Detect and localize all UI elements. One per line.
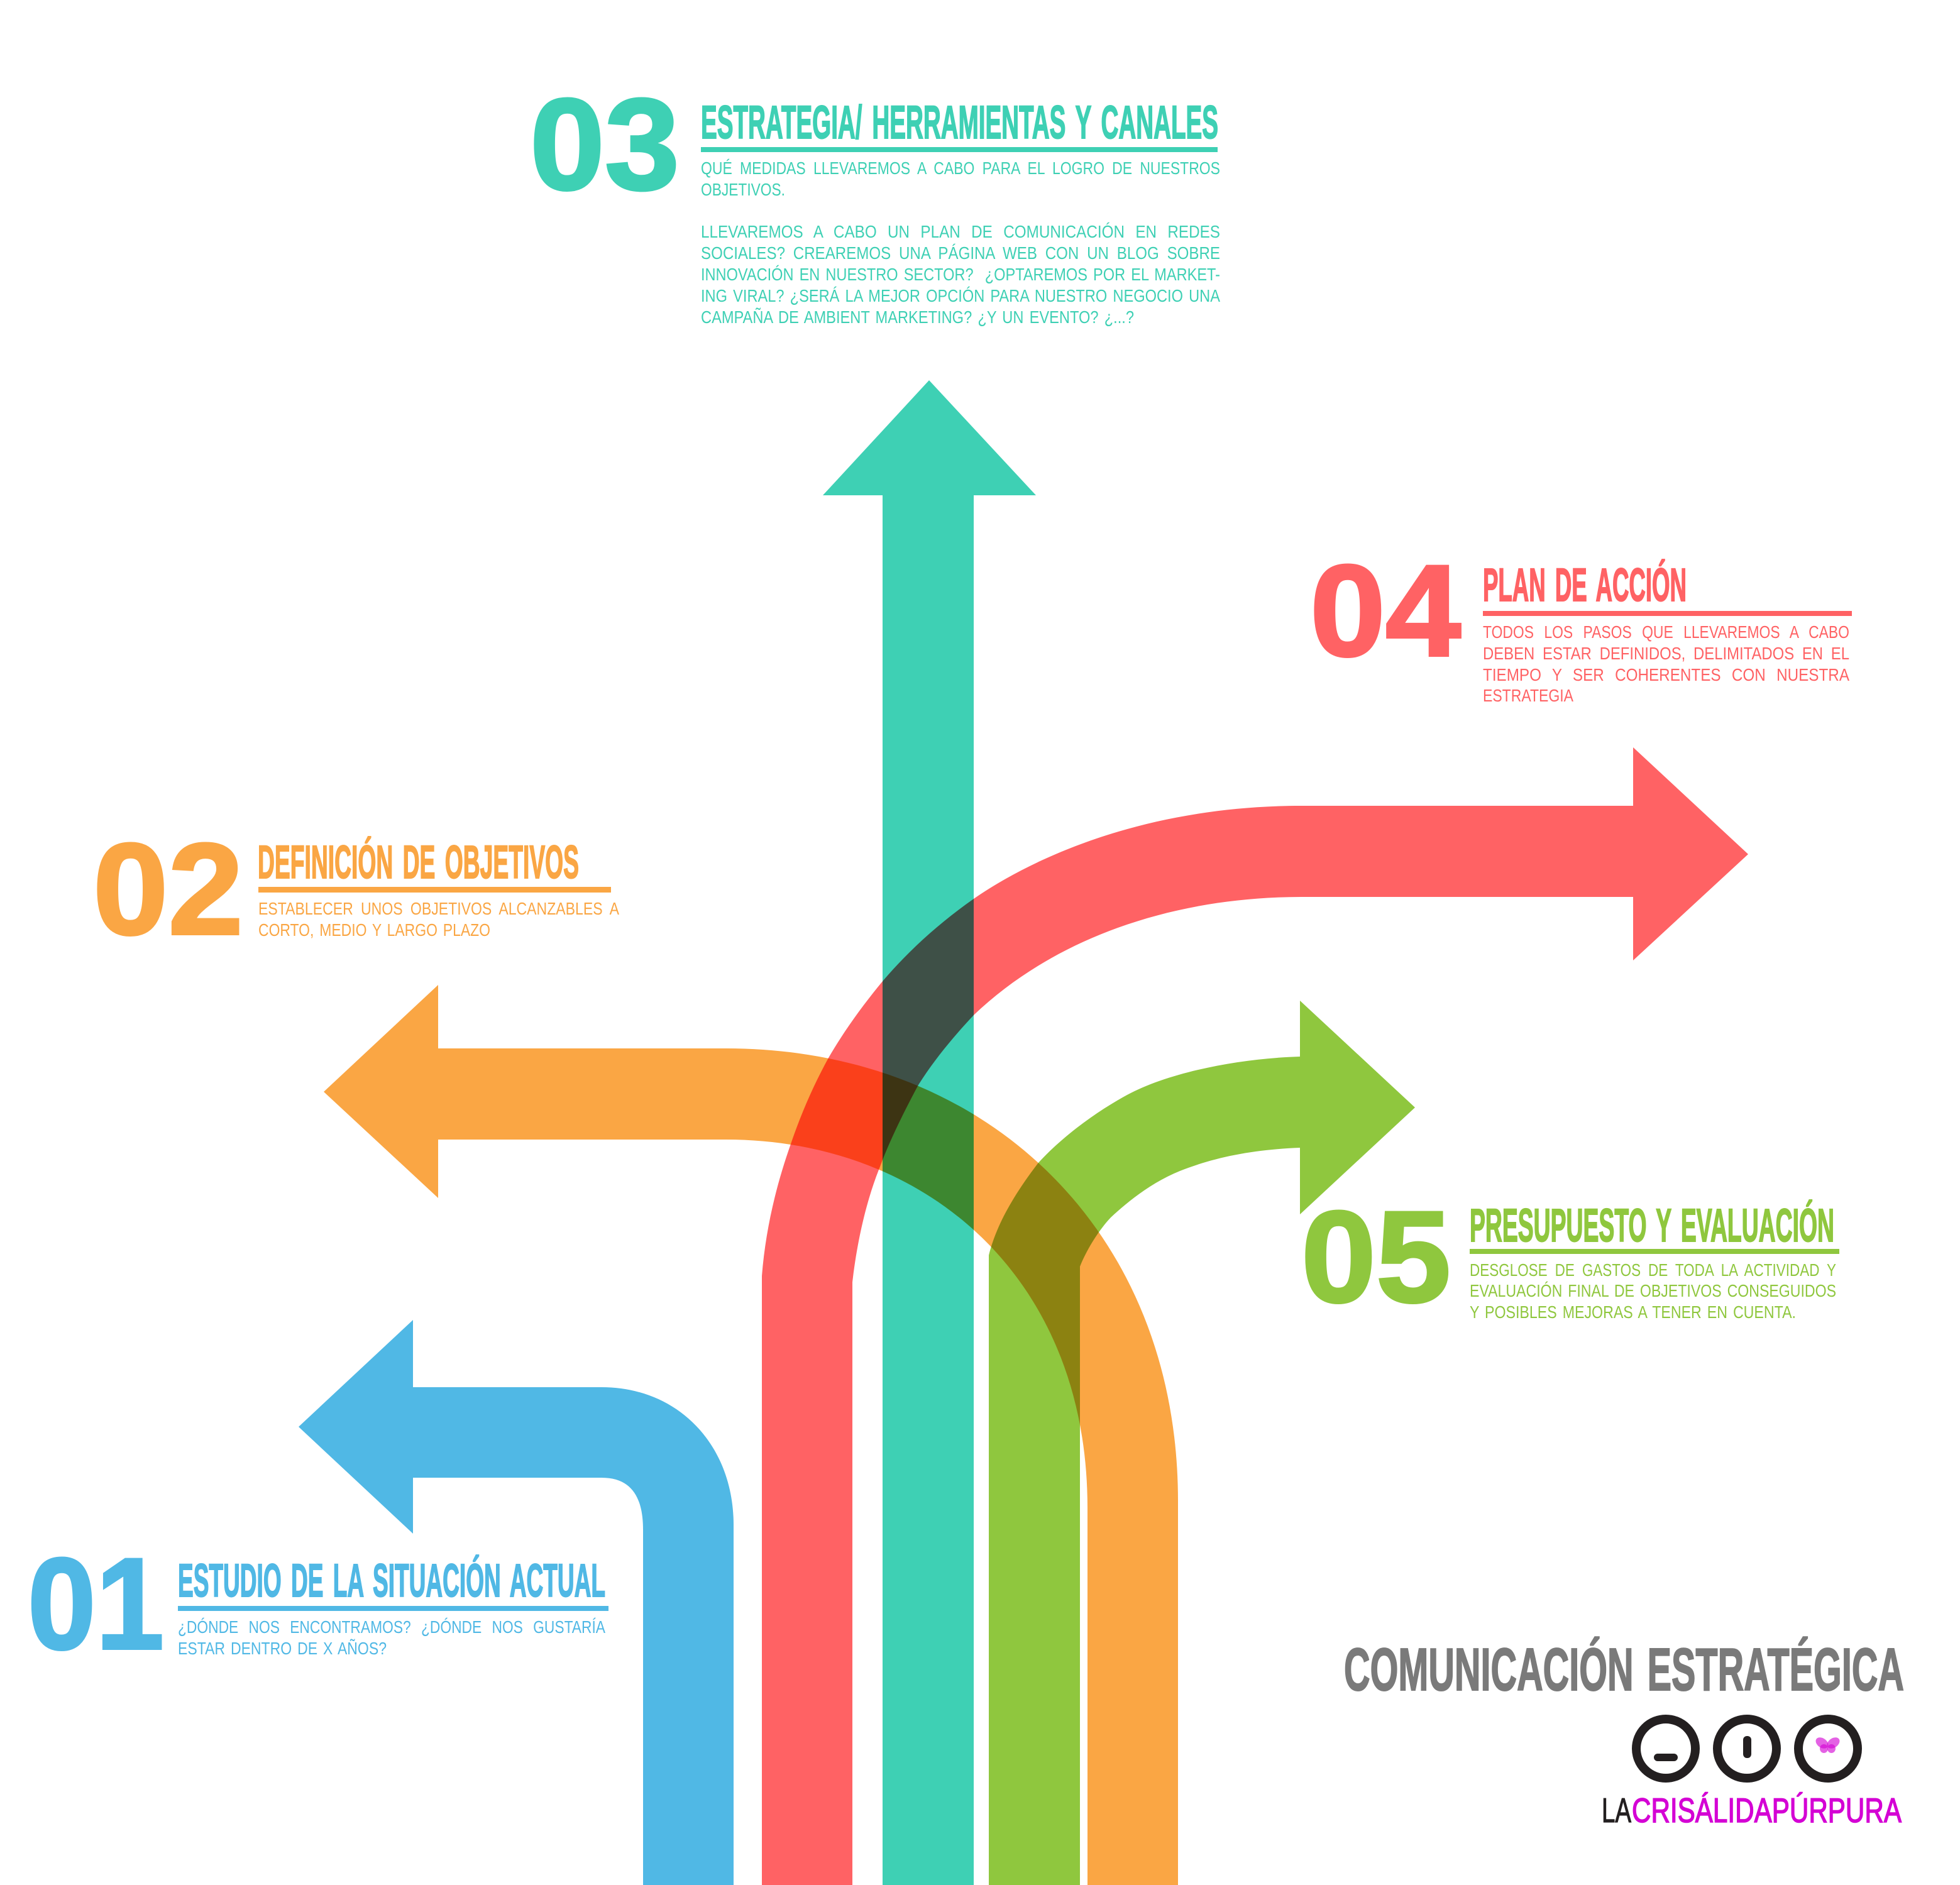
heading rule 05	[1470, 1249, 1839, 1254]
body text 04: DEBEN ESTAR DEFINIDOS, DELIMITADOS EN EL	[1483, 644, 1849, 663]
step 01 block	[28, 1531, 608, 1676]
body text 03	[701, 158, 1221, 327]
arrow 04: red curving right	[762, 747, 1748, 1885]
heading 03: ESTRATEGIA/ HERRAMIENTAS Y CANALES	[701, 96, 1218, 148]
body text 01: ESTAR DENTRO DE X AÑOS?	[178, 1639, 387, 1658]
heading rule 02	[258, 887, 611, 893]
arrow 03: teal straight up	[823, 380, 1036, 1885]
icon: circle with dash	[1636, 1719, 1695, 1778]
body text 05	[1470, 1260, 1836, 1322]
step 04 block	[1310, 538, 1852, 705]
logo icons	[1636, 1719, 1858, 1778]
step number 01: 01	[28, 1531, 164, 1676]
body text 04: ESTRATEGIA	[1483, 686, 1574, 705]
step 05 block	[1301, 1184, 1839, 1329]
body text 04: TODOS LOS PASOS QUE LLEVAREMOS A CABO	[1483, 622, 1849, 642]
heading 01: ESTUDIO DE LA SITUACIÓN ACTUAL	[178, 1554, 605, 1607]
body text 04: TIEMPO Y SER COHERENTES CON NUESTRA	[1483, 665, 1850, 684]
icon: circle with bar	[1717, 1719, 1776, 1778]
body text 05: EVALUACIÓN FINAL DE OBJETIVOS CONSEGUIDOS	[1470, 1281, 1836, 1300]
heading rule 03	[701, 147, 1218, 152]
body text 03: SOCIALES? CREAREMOS UNA PÁGINA WEB CON UN BLOG SOBRE	[701, 243, 1220, 263]
arrow 05: green curving right	[989, 1001, 1415, 1885]
arrow 02: orange curving left	[324, 985, 1178, 1885]
icon: circle with butterfly	[1798, 1719, 1858, 1778]
body text 05: DESGLOSE DE GASTOS DE TODA LA ACTIVIDAD Y	[1470, 1260, 1836, 1280]
body text 03: QUÉ MEDIDAS LLEVAREMOS A CABO PARA EL LOGRO DE NUESTROS	[701, 158, 1220, 178]
body text 03: LLEVAREMOS A CABO UN PLAN DE COMUNICACIÓN EN REDES	[701, 222, 1220, 241]
logo wordmark: LA	[1602, 1791, 1631, 1830]
step 04 block: PLAN DE ACCIÓN	[1483, 559, 1687, 611]
body text 02: ESTABLECER UNOS OBJETIVOS ALCANZABLES A	[258, 899, 620, 918]
step number 05: 05	[1301, 1184, 1451, 1329]
step 02 block	[93, 816, 620, 962]
step number 04: 04	[1310, 538, 1461, 683]
body text 03: INNOVACIÓN EN NUESTRO SECTOR? ¿OPTAREMOS POR EL MARKET-	[701, 265, 1220, 284]
body text 01: ¿DÓNDE NOS ENCONTRAMOS? ¿DÓNDE NOS GUSTARÍA	[178, 1617, 606, 1637]
body text 02: CORTO, MEDIO Y LARGO PLAZO	[258, 920, 490, 940]
body text 01	[178, 1617, 606, 1658]
step 03 block	[530, 72, 1221, 327]
arrow 01: blue turning left	[299, 1320, 734, 1885]
body text 05: Y POSIBLES MEJORAS A TENER EN CUENTA.	[1470, 1302, 1796, 1322]
step number 03: 03	[530, 72, 680, 217]
heading rule 01	[178, 1606, 608, 1611]
heading 02: DEFINICIÓN DE OBJETIVOS	[258, 836, 579, 888]
step number 02: 02	[93, 816, 243, 962]
body text 03: CAMPAÑA DE AMBIENT MARKETING? ¿Y UN EVENTO? ¿...?	[701, 307, 1134, 327]
heading rule 04	[1483, 611, 1852, 616]
body text 03: ING VIRAL? ¿SERÁ LA MEJOR OPCIÓN PARA NUESTRO NEGOCIO UNA	[701, 286, 1221, 305]
body text 02	[258, 899, 620, 940]
body text 04	[1483, 622, 1850, 705]
body text 03: OBJETIVOS.	[701, 180, 785, 199]
